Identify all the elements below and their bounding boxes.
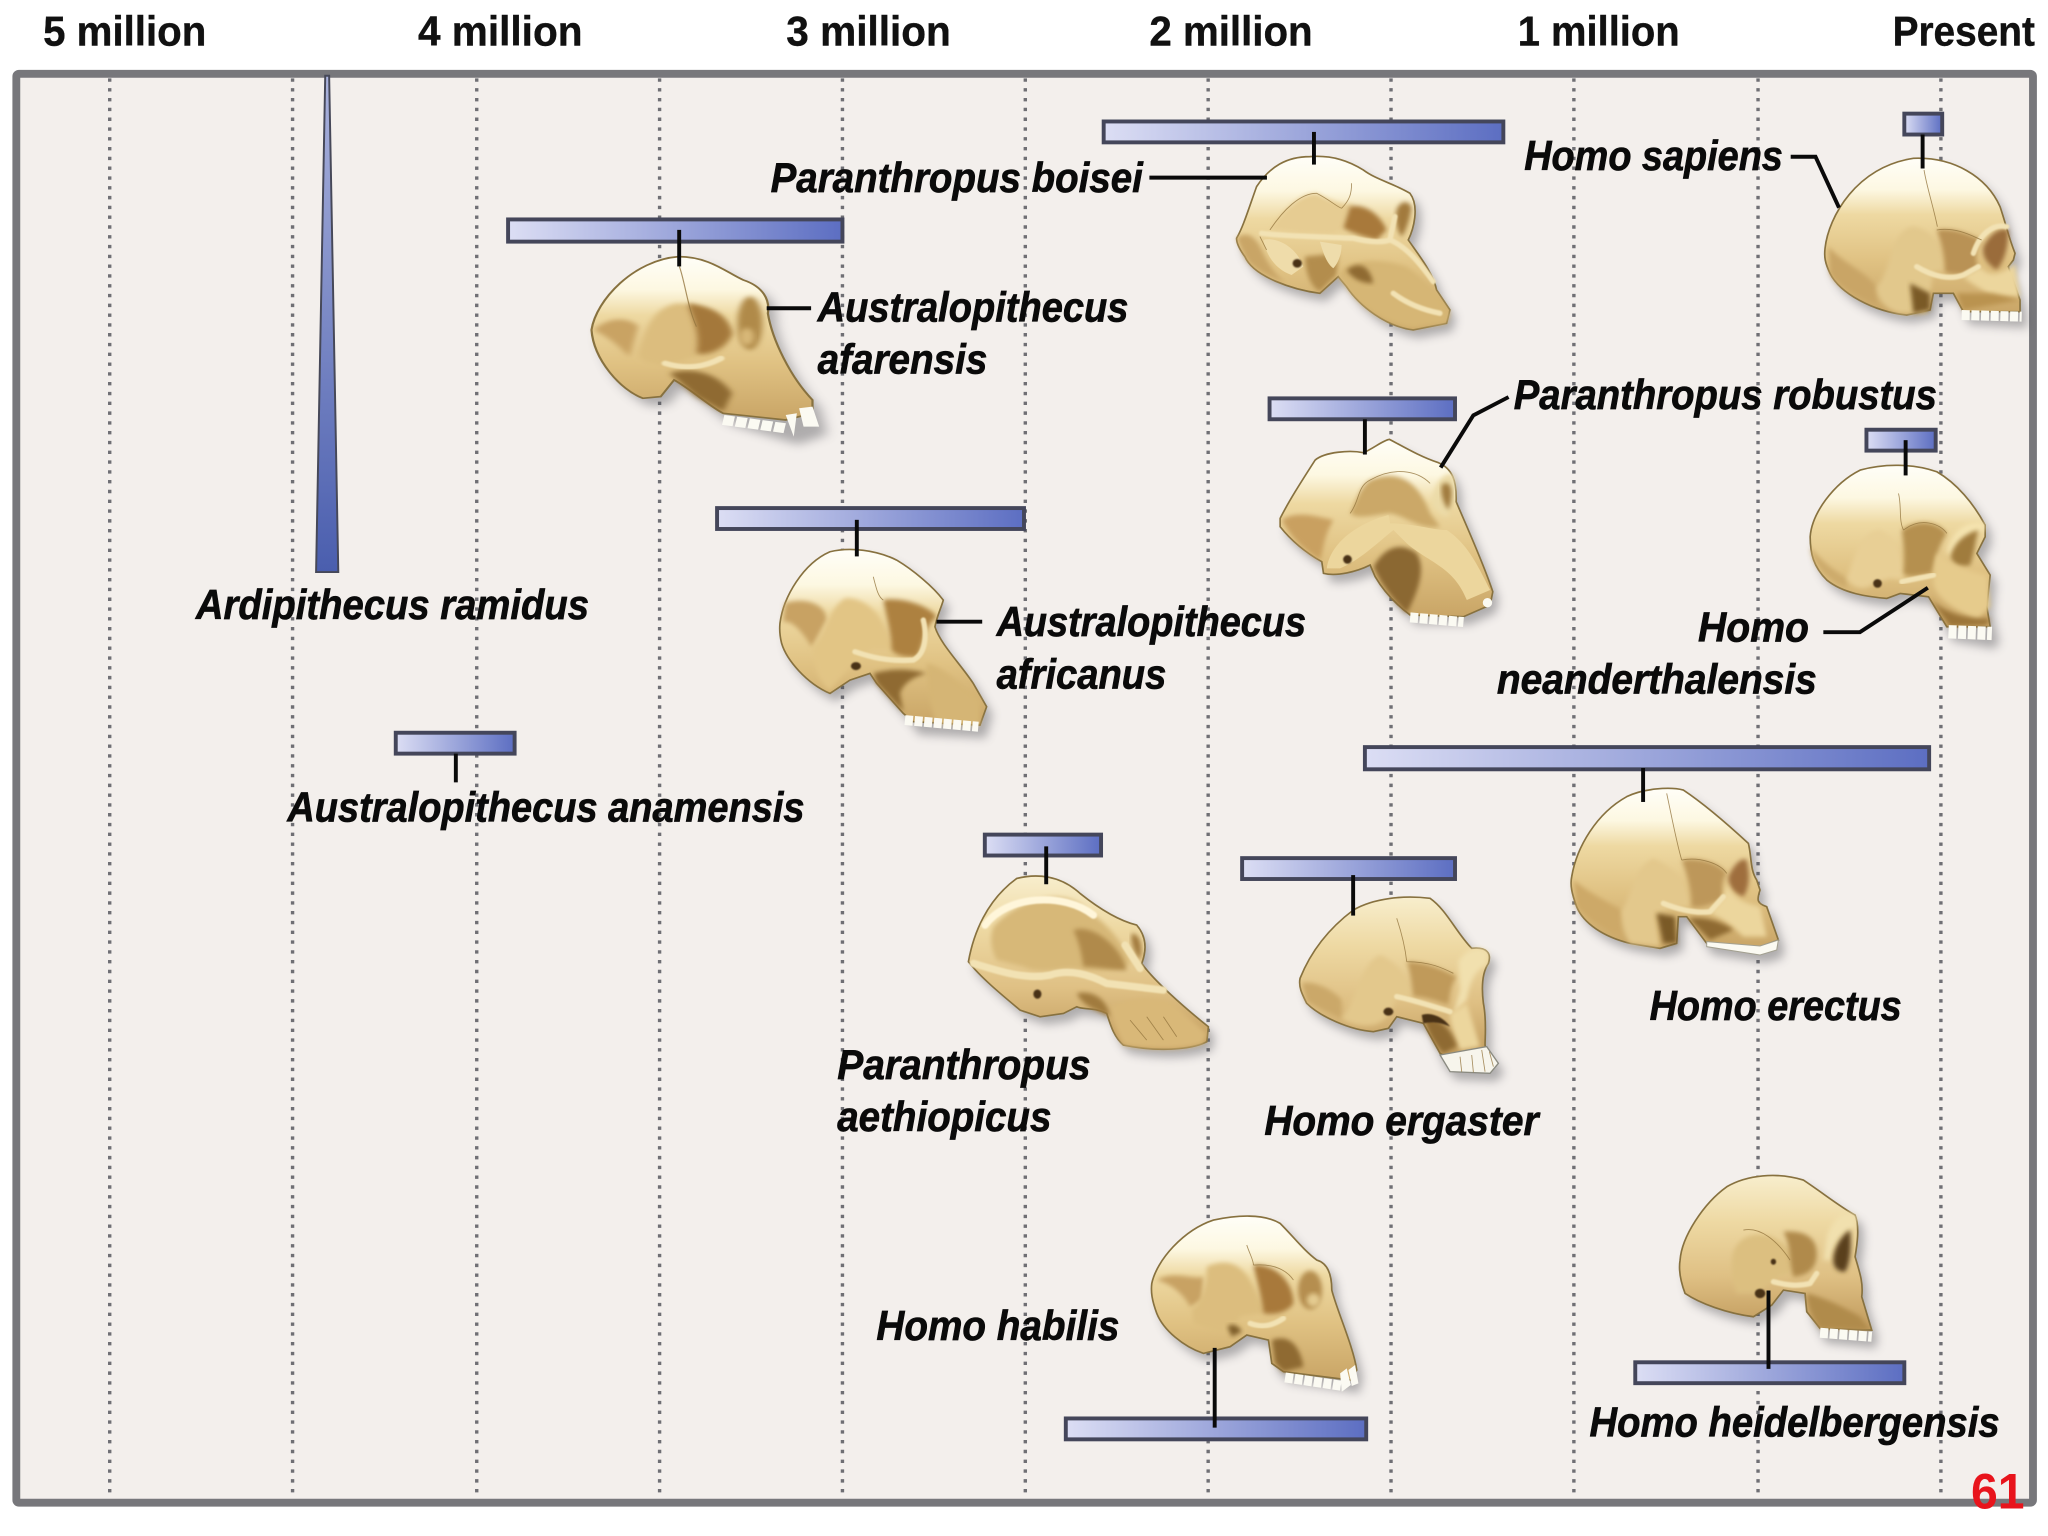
skull: Australopithecus afarensis <box>592 257 827 445</box>
range bar: Homo ergaster <box>1242 858 1455 916</box>
range bar: Homo neanderthalensis <box>1866 430 1936 475</box>
label: Paranthropus boisei: Paranthropus boisei <box>771 154 1144 201</box>
range: Ardipithecus ramidus <box>316 76 338 572</box>
skull: Homo neanderthalensis <box>1810 465 1999 649</box>
leader lines <box>767 157 1928 632</box>
skull: Homo heidelbergensis <box>1679 1175 1878 1348</box>
skull: Paranthropus robustus <box>1280 439 1499 625</box>
label: Australopithecus afarensis <box>817 283 1128 383</box>
skull: Paranthropus aethiopicus <box>968 876 1214 1057</box>
label: Paranthropus aethiopicus: aethiopicus <box>837 1093 1051 1140</box>
label: Homo neanderthalensis <box>1497 603 1817 703</box>
range bar: Australopithecus afarensis <box>508 219 842 266</box>
label: Paranthropus aethiopicus: Paranthropus <box>837 1041 1091 1088</box>
label: Homo habilis: Homo habilis <box>876 1302 1119 1349</box>
time axis labels: Present <box>1893 8 2035 55</box>
time axis labels: 1 million <box>1518 8 1680 55</box>
skull: Australopithecus africanus <box>780 549 993 738</box>
skull: Homo erectus <box>1571 788 1784 963</box>
time axis labels: 2 million <box>1149 8 1313 55</box>
time axis labels: 3 million <box>786 8 951 55</box>
range bar: Australopithecus africanus <box>717 508 1024 556</box>
label: Homo heidelbergensis: Homo heidelbergensis <box>1590 1399 2000 1446</box>
label: Ardipithecus ramidus: Ardipithecus ramidus <box>195 581 589 628</box>
label: Homo neanderthalensis: Homo <box>1698 603 1809 650</box>
label: Homo erectus: Homo erectus <box>1650 982 1902 1029</box>
range bar: Homo heidelbergensis <box>1635 1290 1904 1383</box>
label: Australopithecus africanus: africanus <box>997 650 1166 697</box>
page number: 61 <box>1971 1464 2024 1520</box>
label: Australopithecus anamensis: Australopithecus anamensis <box>286 784 805 831</box>
skull: Paranthropus boisei <box>1237 156 1456 338</box>
range bar: Homo sapiens <box>1904 114 1942 168</box>
skull: Homo ergaster <box>1300 897 1504 1081</box>
range bar: Australopithecus anamensis <box>396 733 515 782</box>
label: Australopithecus afarensis: afarensis <box>818 336 987 383</box>
range bar: Homo habilis <box>1066 1348 1366 1439</box>
range bar: Homo erectus <box>1365 747 1929 802</box>
time axis labels: 4 million <box>418 8 583 55</box>
label: Australopithecus africanus: Australopithecus <box>996 598 1306 645</box>
range bar: Paranthropus aethiopicus <box>985 835 1101 884</box>
label: Australopithecus africanus <box>996 598 1306 697</box>
label: Australopithecus afarensis: Australopithecus <box>817 283 1128 330</box>
time axis labels <box>43 8 2035 55</box>
range bar: Paranthropus boisei <box>1104 121 1503 165</box>
skull: Homo sapiens <box>1825 158 2028 328</box>
range bar: Paranthropus robustus <box>1270 398 1455 455</box>
label: Homo neanderthalensis: neanderthalensis <box>1497 656 1817 703</box>
skull: Homo habilis <box>1151 1216 1363 1393</box>
time axis labels: 5 million <box>43 8 206 55</box>
label: Paranthropus aethiopicus <box>837 1041 1091 1140</box>
label: Homo sapiens: Homo sapiens <box>1524 132 1783 179</box>
label: Paranthropus robustus: Paranthropus robustus <box>1514 371 1937 418</box>
label: Homo ergaster: Homo ergaster <box>1264 1097 1541 1144</box>
